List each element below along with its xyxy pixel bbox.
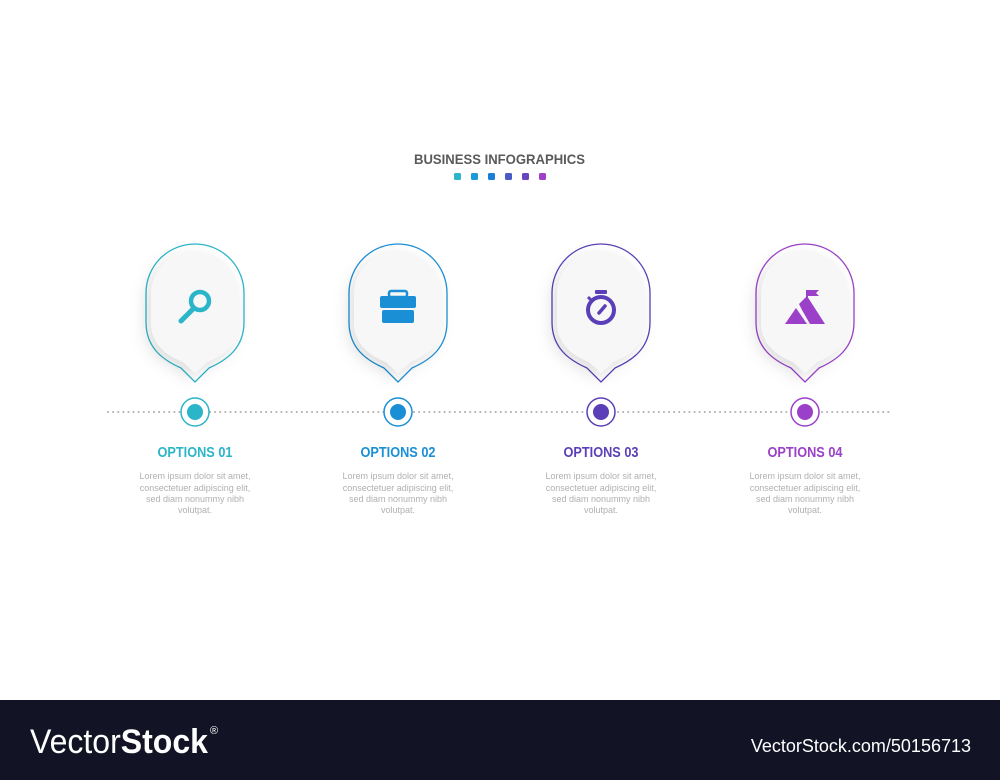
pin 4 [756,244,854,382]
text 1: consectetuer adipiscing elit, [140,483,250,493]
icon: briefcase [380,291,416,323]
text 2: consectetuer adipiscing elit, [343,483,453,493]
dotted timeline [108,411,893,413]
panel: option 2 [342,244,454,515]
panel: option 3 [545,244,657,515]
text 2: volutpat. [381,505,415,515]
pin 1 [146,244,244,382]
icon: stopwatch [588,290,614,323]
footer logo: VectorStock [30,723,208,761]
panel: option 4 [749,244,861,515]
pin 3 [552,244,650,382]
text 4: Lorem ipsum dolor sit amet, [749,471,861,481]
text 4: consectetuer adipiscing elit, [750,483,860,493]
text 3: consectetuer adipiscing elit, [546,483,656,493]
text 3: sed diam nonummy nibh [552,494,650,504]
panel: option 1 [139,244,251,515]
text 3: Lorem ipsum dolor sit amet, [545,471,657,481]
heading 1: OPTIONS 01 [158,445,232,461]
pin 2 [349,244,447,382]
title [414,151,585,180]
text 4: sed diam nonummy nibh [756,494,854,504]
footer url: VectorStock.com/50156713 [751,736,971,756]
heading 2: OPTIONS 02 [360,445,436,461]
icon: magnifier [181,292,209,321]
text 3: volutpat. [584,505,618,515]
footer logo: ® [210,725,218,737]
text 2: sed diam nonummy nibh [349,494,447,504]
heading 3: OPTIONS 03 [564,445,638,461]
icon: mountain flag [785,290,825,324]
text 1: Lorem ipsum dolor sit amet, [139,471,251,481]
heading 4: OPTIONS 04 [768,445,842,461]
marker 4 [791,398,819,426]
text 4: volutpat. [788,505,822,515]
text 1: sed diam nonummy nibh [146,494,244,504]
title: BUSINESS INFOGRAPHICS [414,151,585,167]
marker 1 [181,398,209,426]
footer bar [0,700,1000,780]
marker 3 [587,398,615,426]
text 2: Lorem ipsum dolor sit amet, [342,471,454,481]
text 1: volutpat. [178,505,212,515]
marker 2 [384,398,412,426]
